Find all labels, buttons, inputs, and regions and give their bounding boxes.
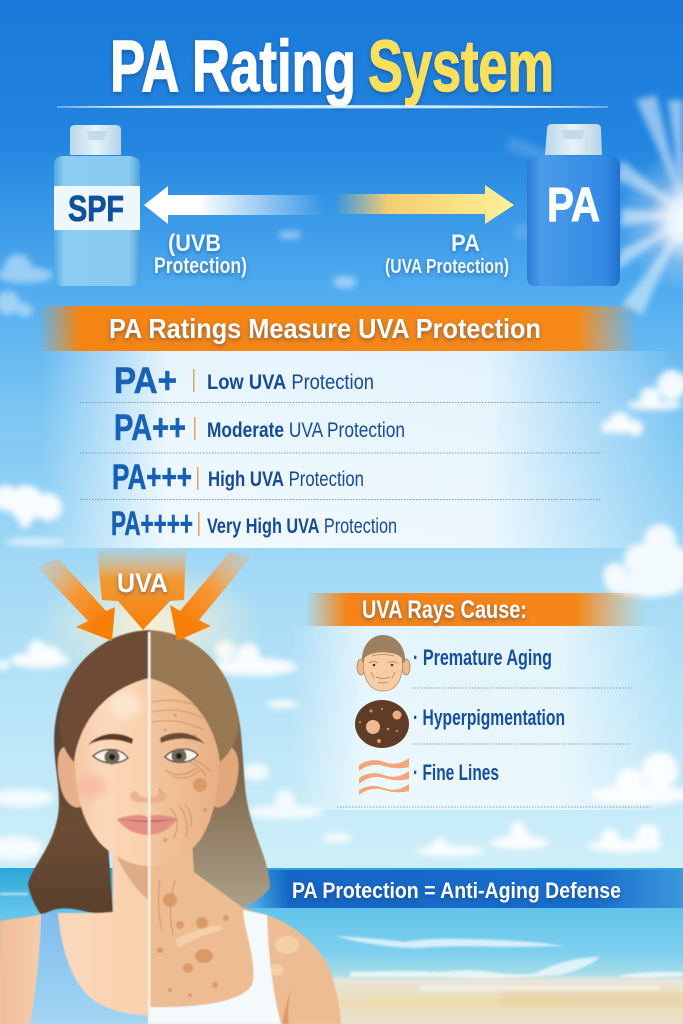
hair: aged side — [149, 632, 270, 908]
arrow: UVA right — [170, 552, 252, 641]
arrow: UVA left — [37, 558, 115, 641]
row: PA++: Moderate UVA Protection — [207, 419, 405, 442]
bottle: SPF — [54, 125, 140, 286]
ear: right — [214, 747, 239, 807]
tank top: young side — [30, 911, 149, 1024]
PA caption — [385, 230, 509, 278]
SPF label: SPF — [68, 188, 124, 229]
ear: left — [58, 747, 82, 807]
arrow: PA UVA — [335, 185, 514, 224]
title: System — [368, 27, 554, 107]
PA label: PA — [547, 179, 600, 232]
title divider — [57, 106, 608, 108]
arrow: SPF UVB — [144, 186, 325, 224]
PA caption: (UVA Protection) — [385, 256, 509, 278]
row: PA+ — [114, 360, 374, 401]
SPF caption: Protection) — [154, 253, 247, 278]
arrow: UVA center — [97, 550, 186, 630]
icon: aged face — [357, 635, 410, 691]
PA caption: PA — [451, 230, 480, 257]
cause: hyperpigmentation: · Hyperpigmentation — [413, 705, 565, 730]
SPF caption — [154, 230, 247, 278]
clouds — [0, 231, 683, 860]
row: PA+: PA+ — [114, 360, 177, 401]
icon: pigmented skin — [355, 700, 409, 748]
bottle: PA — [527, 124, 620, 286]
banner: anti-aging defense: PA Protection = Anti-Aging Defense — [292, 878, 621, 903]
UVA label: UVA — [117, 568, 168, 598]
hair: young side — [28, 632, 149, 916]
neck shadow — [113, 848, 149, 900]
eyes — [93, 748, 198, 764]
icon: fine lines — [359, 758, 409, 795]
row: PA+++: PA+++ — [112, 458, 192, 497]
SPF caption: (UVB — [168, 230, 221, 257]
neck and chest: left — [0, 840, 149, 1024]
glow behind head — [35, 560, 265, 690]
neck and chest: right — [149, 840, 341, 1024]
center dividing line — [148, 632, 150, 1024]
row: PA++++: PA++++ — [111, 505, 193, 543]
hair over forehead — [60, 630, 149, 762]
cause: fine lines: · Fine Lines — [413, 760, 499, 785]
ratings banner: PA Ratings Measure UVA Protection — [109, 313, 541, 344]
row: PA+: Low UVA Protection — [207, 371, 374, 394]
row: PA++++ — [111, 505, 397, 543]
panel: UVA rays cause — [290, 593, 675, 810]
cause: premature aging: · Premature Aging — [413, 645, 552, 670]
aged skin: wrinkles and spots — [152, 700, 299, 1024]
eyebrows — [88, 734, 133, 745]
sun burst — [505, 95, 683, 315]
row: PA++++: Very High UVA Protection — [207, 515, 397, 538]
ratings banner — [38, 306, 638, 351]
row: PA+++: High UVA Protection — [208, 468, 364, 491]
face — [74, 678, 219, 866]
nose — [130, 791, 166, 802]
causes banner: UVA Rays Cause: — [362, 596, 527, 624]
causes banner — [305, 593, 645, 626]
row: PA++ — [114, 407, 405, 448]
banner: anti-aging defense — [245, 870, 683, 908]
row: PA+++ — [112, 458, 364, 497]
sea and beach — [0, 868, 683, 1024]
panel: PA ratings — [38, 306, 680, 548]
illustration: woman half young half aged — [0, 630, 341, 1024]
lips — [117, 815, 178, 835]
title: PA Rating — [110, 27, 356, 107]
row: PA++: PA++ — [114, 407, 186, 448]
tank top: aged side — [149, 910, 281, 1024]
